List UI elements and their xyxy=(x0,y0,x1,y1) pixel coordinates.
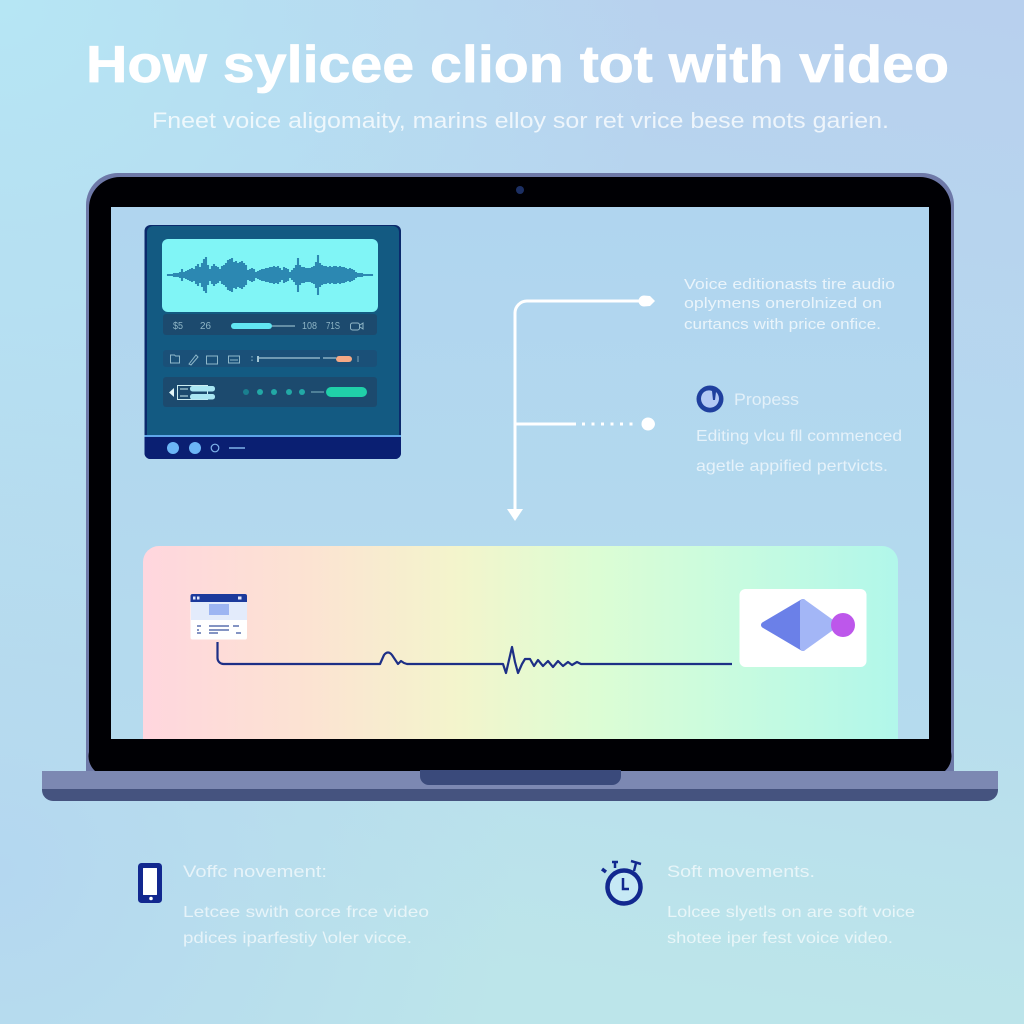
heading: propess: Propess xyxy=(734,390,799,409)
text block: editing note xyxy=(696,428,902,475)
editor status bar xyxy=(144,435,401,459)
text block: movement right: shotee iper fest voice video. xyxy=(667,930,893,947)
text block: movement right: Lolcee slyetls on are soft voice xyxy=(667,904,915,921)
arrows: flow connector xyxy=(507,296,655,521)
panel: gradient timeline xyxy=(143,546,898,739)
laptop notch xyxy=(420,770,621,785)
laptop xyxy=(42,173,998,801)
transport row: 108 xyxy=(302,321,317,332)
signal line xyxy=(218,642,732,673)
transport row: $5 xyxy=(173,321,183,332)
transport row: 26 xyxy=(200,321,211,332)
gradient background xyxy=(143,546,898,739)
text block: voice editing note: Voice editionasts tire audio xyxy=(684,276,895,293)
text block: movement left: Letcee swith corce frce video xyxy=(183,904,429,921)
panel: audio editor xyxy=(144,225,401,459)
tools row xyxy=(163,350,377,367)
editor body xyxy=(144,225,401,459)
text block: movement left xyxy=(183,862,429,947)
text block: movement left: Voffc novement: xyxy=(183,862,327,881)
icon: phone xyxy=(138,863,162,903)
icon: stopwatch xyxy=(602,861,641,904)
laptop bezel xyxy=(89,177,951,771)
card: output preview xyxy=(740,589,866,667)
icon: progress dial xyxy=(696,386,724,412)
timeline row xyxy=(163,377,377,407)
laptop base top xyxy=(42,771,998,790)
text block: movement left: pdices iparfestiy \oler vicce. xyxy=(183,930,412,947)
text block: editing note: agetle appified pertvicts. xyxy=(696,458,888,475)
icon: video window xyxy=(190,594,247,640)
subtitle: Fneet voice aligomaity, marins elloy sor ret vrice bese mots garien. xyxy=(152,108,889,133)
laptop base front xyxy=(42,789,998,801)
transport row: 71S xyxy=(326,321,340,332)
title: How sylicee clion tot with video xyxy=(86,36,949,94)
text block: movement right: Soft movements. xyxy=(667,862,815,881)
laptop screen xyxy=(111,207,929,739)
text block: voice editing note xyxy=(684,276,895,333)
laptop lid frame xyxy=(86,173,954,775)
transport row xyxy=(163,314,377,335)
waveform display xyxy=(162,239,378,312)
text block: editing note: Editing vlcu fll commenced xyxy=(696,428,902,445)
text block: voice editing note: oplymens onerolnized on xyxy=(684,295,882,312)
webcam xyxy=(516,186,524,194)
text block: voice editing note: curtancs with price onfice. xyxy=(684,316,881,333)
text block: movement right xyxy=(667,862,915,947)
